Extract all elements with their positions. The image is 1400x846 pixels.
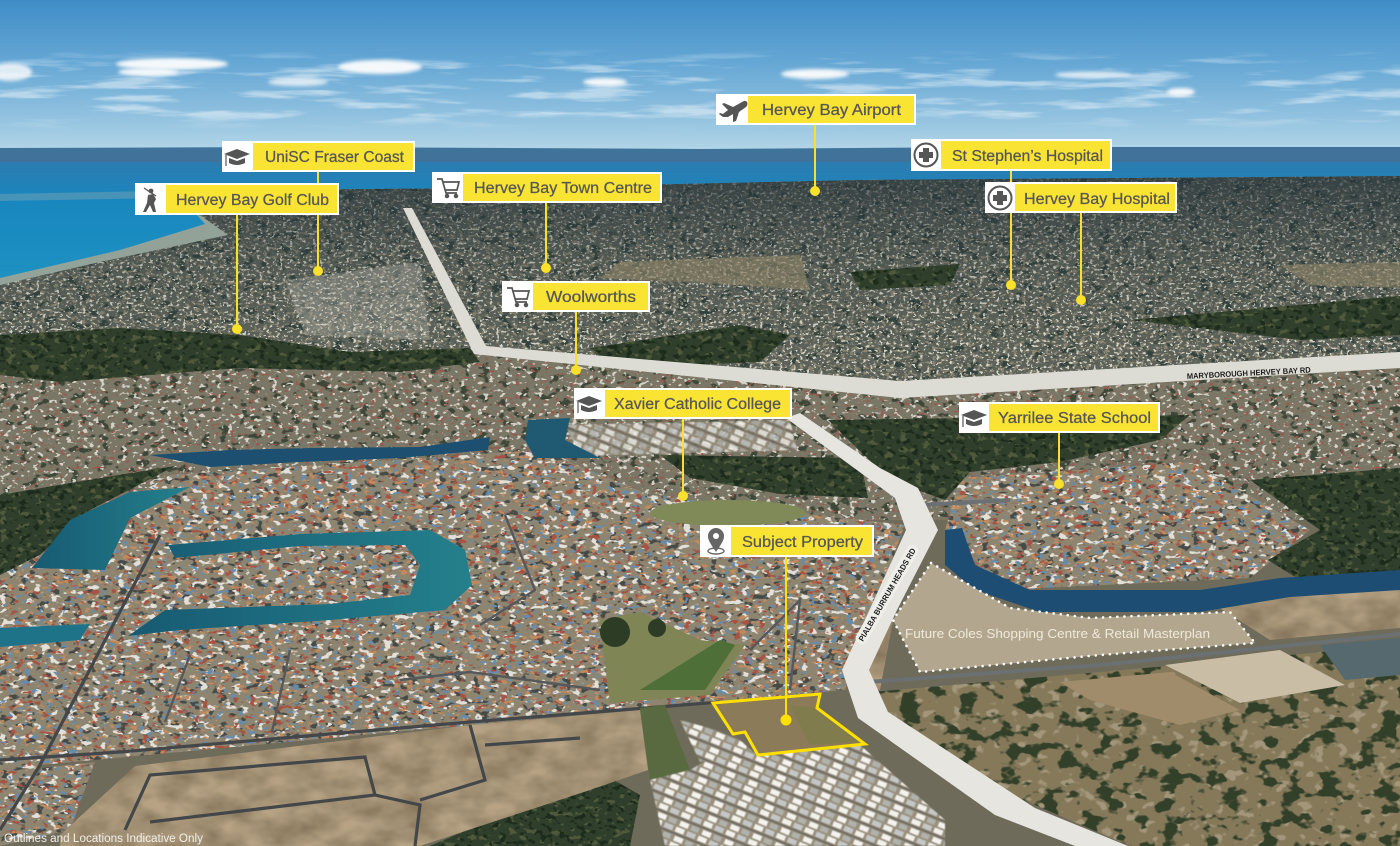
tree belts xyxy=(0,260,1400,846)
icon: medical cross xyxy=(914,144,938,166)
label: Xavier Catholic College xyxy=(574,388,792,501)
school field xyxy=(650,500,806,526)
icon: map pin xyxy=(708,528,724,554)
label: UniSC Fraser Coast xyxy=(222,141,415,276)
label: UniSC Fraser Coast: UniSC Fraser Coast xyxy=(265,149,405,166)
label: Hervey Bay Hospital: Hervey Bay Hospital xyxy=(1024,191,1170,208)
icon: graduation cap xyxy=(224,149,250,166)
label: Xavier Catholic College: Xavier Catholic College xyxy=(614,396,781,413)
bottom townhouses xyxy=(650,745,945,846)
label: St Stephen's Hospital: St Stephen’s Hospital xyxy=(952,148,1103,165)
verge planting xyxy=(640,705,690,780)
icon: graduation cap xyxy=(961,410,987,427)
label: Hervey Bay Airport xyxy=(716,94,916,196)
pialba road xyxy=(786,413,1128,846)
light apartment strip xyxy=(565,420,797,456)
label: Hervey Bay Hospital xyxy=(985,182,1177,305)
distant cleared fields xyxy=(600,255,1400,290)
bright clouds xyxy=(0,58,1195,96)
label: Subject Property: Subject Property xyxy=(742,534,863,551)
park trees xyxy=(600,617,666,647)
icon: plane xyxy=(719,101,747,122)
label: Yarrilee State School xyxy=(959,402,1160,489)
canals xyxy=(32,487,190,570)
icon: shopping cart xyxy=(437,179,459,197)
main highway xyxy=(403,208,1400,398)
lower-right bushland xyxy=(860,640,1400,846)
coles site river xyxy=(945,528,1400,612)
site caption: Future Coles Shopping Centre & Retail Masterplan xyxy=(905,626,1210,641)
label: Woolworths xyxy=(502,281,650,375)
park xyxy=(600,612,745,703)
site outline xyxy=(893,563,1255,672)
icon: graduation cap xyxy=(576,396,602,413)
icon: shopping cart xyxy=(507,288,529,306)
distance haze xyxy=(0,176,1400,345)
future coles site xyxy=(893,563,1255,672)
far shore sand xyxy=(0,214,232,288)
label: St Stephen's Hospital xyxy=(911,139,1112,290)
icon: golfer xyxy=(143,188,156,212)
dev land roads xyxy=(0,535,720,846)
road name: pialba: PIALBA BURRUM HEADS RD xyxy=(857,547,918,643)
distant island xyxy=(0,147,1400,168)
subject site xyxy=(713,694,865,755)
label: Hervey Bay Town Centre xyxy=(432,172,662,273)
icon: medical cross xyxy=(988,186,1012,210)
sky xyxy=(0,0,1400,152)
middle suburbs xyxy=(0,345,1400,525)
label: Hervey Bay Golf Club: Hervey Bay Golf Club xyxy=(176,192,329,209)
label: Woolworths: Woolworths xyxy=(546,289,636,306)
disclaimer: Outlines and Locations Indicative Only xyxy=(4,833,203,845)
sea xyxy=(0,162,1400,292)
subject property outline xyxy=(713,694,865,755)
lower-right cleared land xyxy=(1165,650,1345,703)
cloud layer xyxy=(0,48,1400,130)
upper lake xyxy=(150,437,490,467)
label: Yarrilee State School: Yarrilee State School xyxy=(998,410,1151,427)
bare-earth development land xyxy=(0,580,1400,846)
suburb streets xyxy=(165,515,800,732)
commercial area xyxy=(285,262,430,340)
distant township xyxy=(0,176,1400,381)
label: Hervey Bay Airport: Hervey Bay Airport xyxy=(762,102,902,119)
label: Subject Property xyxy=(700,525,874,726)
label: Hervey Bay Golf Club xyxy=(135,183,339,334)
label: Hervey Bay Town Centre: Hervey Bay Town Centre xyxy=(474,180,652,197)
side arterial road xyxy=(868,634,1400,682)
foreground housing xyxy=(0,445,1400,846)
road name: maryborough: MARYBOROUGH HERVEY BAY RD xyxy=(1187,366,1311,381)
